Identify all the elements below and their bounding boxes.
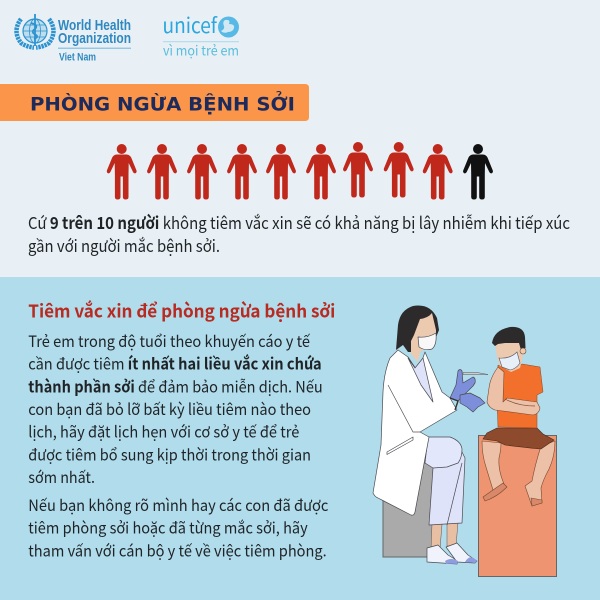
trousers	[429, 450, 465, 525]
hair	[396, 306, 439, 352]
hair	[492, 327, 526, 350]
body paragraph 1	[28, 330, 323, 488]
sandals	[483, 483, 507, 501]
illustration: doctor vaccinating child	[373, 306, 556, 576]
WHO wordmark: Viet Nam	[59, 52, 96, 64]
title banner	[0, 84, 309, 121]
WHO wordmark: Organization	[58, 30, 131, 47]
orange box seat	[478, 436, 556, 576]
arms	[487, 367, 540, 415]
right leg	[525, 441, 555, 506]
statistic text	[28, 210, 570, 257]
body paragraph 1: lịch, hãy đặt lịch hẹn với cơ sở y tế để trẻ	[28, 421, 299, 443]
child	[482, 327, 555, 506]
neck and face	[411, 313, 436, 362]
body paragraph 1: Trẻ em trong độ tuổi theo khuyến cáo y tế	[28, 330, 310, 352]
child's mask	[499, 352, 520, 370]
neck and head	[495, 337, 523, 372]
coat pocket	[387, 437, 413, 454]
body paragraph 2	[28, 494, 328, 561]
ear	[520, 348, 526, 354]
orange shirt	[497, 364, 543, 428]
body paragraph 2: tham vấn với cán bộ y tế về việc tiêm phòng.	[28, 539, 327, 561]
gloves	[450, 370, 475, 401]
body paragraph 1: cần được tiêm ít nhất hai liều vắc xin chứa	[28, 353, 322, 375]
logo: World Health Organization Viet Nam	[16, 14, 131, 64]
section heading: Tiêm vắc xin để phòng ngừa bệnh sởi	[28, 298, 335, 324]
cuff	[450, 398, 458, 410]
stool	[383, 463, 435, 557]
doctor	[373, 306, 488, 564]
pictogram: 9 in 10 people	[107, 142, 493, 200]
WHO wordmark: World Health	[58, 17, 131, 34]
scrub top	[408, 358, 433, 402]
body paragraph 1: thành phần sởi để đảm bảo miễn dịch. Nếu	[28, 375, 323, 397]
WHO wordmark	[58, 17, 131, 64]
shorts	[483, 428, 554, 449]
doctor calves	[431, 522, 458, 549]
icon: unicef globe	[218, 16, 239, 38]
statistic text: Cứ 9 trên 10 người không tiêm vắc xin sẽ có khả năng bị lây nhiễm khi tiếp xúc	[28, 210, 570, 234]
lab coat	[373, 350, 457, 515]
unicef wordmark: unicef	[162, 10, 218, 40]
body paragraph 1: sớm nhất.	[28, 466, 95, 488]
body paragraph 1: được tiêm bổ sung kịp thời trong thời gian	[28, 443, 311, 465]
mask	[418, 333, 436, 350]
left leg	[482, 441, 504, 490]
logo: unicef	[162, 10, 239, 60]
syringe	[463, 372, 488, 374]
icon: WHO emblem	[16, 14, 54, 48]
statistic text: gần với người mắc bệnh sởi.	[28, 233, 220, 257]
shoes	[427, 545, 458, 564]
title: PHÒNG NGỪA BỆNH SỞI	[30, 90, 295, 116]
body paragraph 2: Nếu bạn không rõ mình hay các con đã được	[28, 494, 328, 516]
body paragraph 1: con bạn đã bỏ lỡ bất kỳ liều tiêm nào theo	[28, 398, 311, 420]
unicef tagline: vì mọi trẻ em	[163, 40, 239, 60]
body paragraph 2: tiêm phòng sởi hoặc đã từng mắc sởi, hãy	[28, 517, 308, 539]
